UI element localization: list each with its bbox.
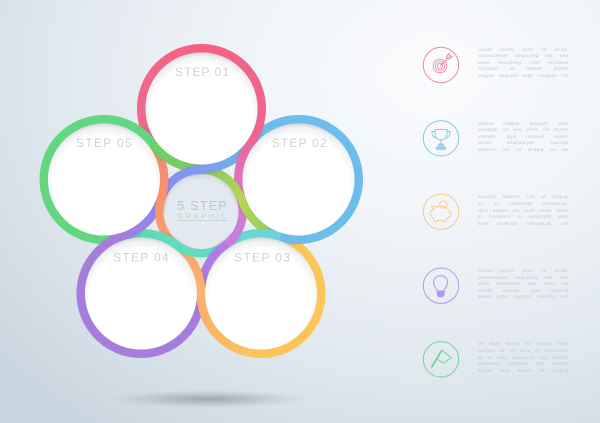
- panel: step 05: [48, 124, 160, 236]
- panel: step 04: STEP 04: [113, 251, 169, 265]
- soft shadows at ribbon crossings: [44, 48, 359, 354]
- panel: step 01: [146, 52, 258, 164]
- text block 4: diam nonummy wisi enim ad: [478, 282, 568, 287]
- text block 2: volutpat. Ut wisi enim ad minim: [478, 128, 568, 133]
- woven ribbon rings: [44, 48, 359, 354]
- text block 3: Duis autem vel eum iriure dolor: [478, 209, 568, 214]
- panel: step 01: STEP 01: [175, 65, 229, 79]
- text block 5: augue duis dolore te feugiat: [478, 369, 568, 374]
- centre title: GRAPHIC: [177, 212, 227, 221]
- text block 3: ex ea commodo consequat.: [478, 202, 568, 207]
- text block 2: veniam, quis nostrud exerci: [478, 135, 568, 140]
- text block 5: et iu odio dignissim qui blandit: [478, 356, 568, 361]
- text block 1: magna aliquam erat volutpat. Ut: [478, 74, 568, 79]
- text block 1: tincidunt ut laoreet dolore: [478, 67, 568, 72]
- text block 1: consectetuer adipiscing elit, sed: [478, 54, 568, 59]
- text block 5: [478, 342, 568, 374]
- text block 2: Dolore magna aliquam erat: [478, 122, 568, 127]
- text block 1: [478, 48, 568, 79]
- text block 3: esse molestie consequat, vel: [478, 222, 568, 227]
- text block 2: [478, 122, 568, 153]
- panel: step 03: STEP 03: [234, 251, 290, 265]
- text block 5: praesent luptatum zzril delenit: [478, 362, 568, 367]
- text block 2: tation ullamcorper suscipit: [478, 141, 568, 146]
- centre disc: [163, 174, 239, 250]
- icon: flag: [423, 342, 459, 377]
- text block 2: lobortis nisl ut aliquip ex ea: [478, 148, 568, 153]
- ribbon pieces passing underneath: [44, 48, 359, 354]
- text block 4: consectetuer adipiscing elit, sed: [478, 276, 568, 281]
- text block 4: [478, 269, 568, 300]
- icon: piggy bank: [423, 194, 459, 229]
- text block 5: Vel illum dolore eu feugiat nulla: [478, 342, 568, 347]
- panel: step 02: [242, 124, 354, 236]
- text block 5: facilisis at ve eros et accumsan: [478, 349, 568, 354]
- icon: light bulb: [423, 268, 459, 303]
- panel: step 02: STEP 02: [272, 136, 327, 150]
- ribbon pieces passing on top: [44, 48, 359, 354]
- icon: trophy: [423, 121, 459, 156]
- panel: step 05: STEP 05: [76, 136, 132, 150]
- floor shadow: [110, 390, 306, 408]
- panel: step 03: [205, 238, 317, 350]
- text block 4: minim veniam, quis nostrud: [478, 289, 568, 294]
- text block 4: Lorem ipsum dolor sit amet,: [478, 269, 568, 274]
- panel: step 04: [85, 238, 197, 350]
- text block 4: exerci tatio suscipit lobortis nisl: [478, 295, 568, 300]
- text block 3: in hendrerit in vulputate velit: [478, 215, 568, 220]
- text block 3: [478, 195, 568, 227]
- text block 1: diam nonummy nibh euismod: [478, 61, 568, 66]
- centre title: [177, 199, 227, 221]
- icon: target: [423, 47, 459, 83]
- text block 1: Lorem ipsum dolor sit amet,: [478, 48, 568, 53]
- text block 3: Suscipit lobortis nisl ut aliquip: [478, 195, 568, 200]
- centre title: 5 STEP: [177, 199, 227, 213]
